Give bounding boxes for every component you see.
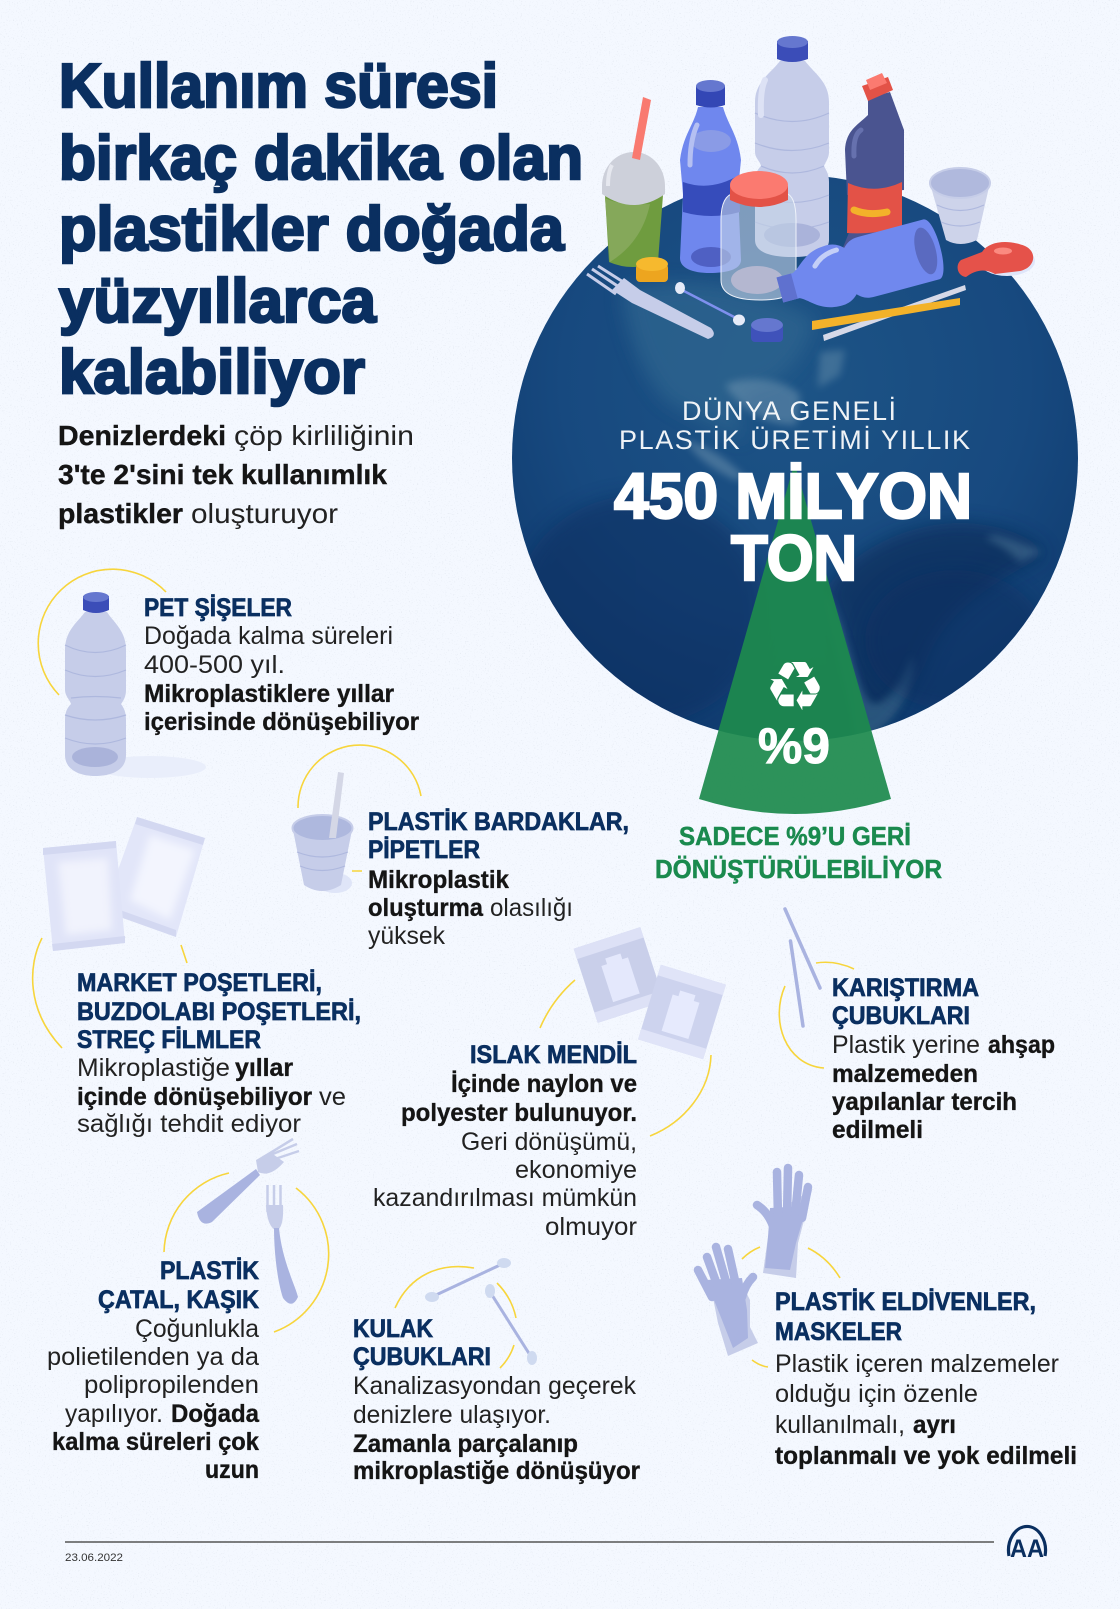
title bbox=[59, 52, 583, 407]
heading bbox=[368, 808, 629, 864]
icon: wipes bbox=[574, 927, 726, 1059]
body text: Çoğunlukla bbox=[135, 1315, 259, 1343]
icon: cup with straw bbox=[292, 772, 352, 893]
heading: PLASTİK bbox=[160, 1257, 259, 1285]
recycling percentage: %9 bbox=[758, 718, 830, 774]
panel: stirring sticks bbox=[779, 909, 1055, 1144]
body text: Geri dönüşümü, bbox=[461, 1128, 637, 1156]
body text: yapılanlar tercih bbox=[832, 1088, 1017, 1116]
heading: ÇUBUKLARI bbox=[832, 1002, 970, 1030]
icon: cotton swabs bbox=[425, 1258, 537, 1365]
body text bbox=[775, 1350, 1077, 1470]
body text: Plastik yerine bbox=[832, 1031, 980, 1059]
heading bbox=[353, 1315, 491, 1371]
title: plastikler doğada bbox=[59, 195, 565, 264]
heading: MASKELER bbox=[775, 1318, 902, 1346]
panel: market bags bbox=[33, 817, 361, 1138]
body text: denizlere ulaşıyor. bbox=[353, 1401, 551, 1429]
big figure: 450 MİLYON bbox=[614, 460, 972, 532]
body text: mikroplastiğe dönüşüyor bbox=[353, 1457, 640, 1485]
body text: ve bbox=[319, 1083, 346, 1111]
body text: içinde dönüşebiliyor bbox=[77, 1083, 312, 1111]
body text: uzun bbox=[205, 1456, 259, 1484]
heading: PET ŞİŞELER bbox=[144, 594, 292, 622]
body text: polipropilenden bbox=[84, 1371, 259, 1399]
body text: Kanalizasyondan geçerek bbox=[353, 1372, 636, 1400]
subtitle: Denizlerdeki bbox=[58, 420, 226, 451]
heading: ÇUBUKLARI bbox=[353, 1343, 491, 1371]
body text: polyester bulunuyor. bbox=[401, 1099, 637, 1127]
icon: large clear bottle bbox=[755, 36, 829, 257]
body text: 400-500 yıl. bbox=[144, 651, 285, 679]
body text: Zamanla parçalanıp bbox=[353, 1430, 578, 1458]
icon: cotton swab on globe bbox=[675, 282, 745, 326]
body text: Mikroplastik bbox=[368, 866, 509, 894]
body text bbox=[77, 1054, 346, 1138]
heading: BUZDOLABI POŞETLERİ, bbox=[77, 998, 361, 1026]
body text: Doğada kalma süreleri bbox=[144, 622, 393, 650]
title: yüzyıllarca bbox=[59, 267, 377, 336]
recycling note: DÖNÜŞTÜRÜLEBİLİYOR bbox=[655, 854, 942, 884]
subtitle: oluşturuyor bbox=[191, 498, 338, 529]
title: kalabiliyor bbox=[59, 338, 365, 407]
big figure bbox=[614, 460, 972, 594]
body text: polietilenden ya da bbox=[47, 1343, 259, 1371]
heading bbox=[832, 974, 979, 1030]
body text: olasılığı bbox=[490, 894, 573, 922]
body text: Doğada bbox=[171, 1400, 260, 1428]
heading: ISLAK MENDİL bbox=[470, 1041, 637, 1069]
recycling note: SADECE %9’U GERİ bbox=[679, 821, 911, 851]
icon: stirring sticks bbox=[785, 909, 820, 1026]
icon: orange cap bbox=[636, 257, 668, 282]
subtitle: çöp kirliliğinin bbox=[234, 420, 414, 451]
panel: gloves and masks bbox=[698, 1168, 1077, 1470]
icon: red spoon bbox=[958, 242, 1035, 277]
body text bbox=[353, 1372, 640, 1485]
icon: plastic bags bbox=[43, 817, 205, 951]
body text: edilmeli bbox=[832, 1116, 923, 1144]
recycling note bbox=[655, 821, 942, 884]
logo: AA: AA bbox=[1010, 1535, 1044, 1563]
body text bbox=[144, 622, 419, 736]
icon: bottom glove bbox=[698, 1247, 758, 1356]
panel: cups and straws bbox=[292, 745, 629, 950]
panel: cotton swabs bbox=[353, 1258, 640, 1485]
panel: wet wipes bbox=[373, 927, 726, 1241]
body text: içerisinde dönüşebiliyor bbox=[144, 708, 419, 736]
icon: bleach bottle bbox=[842, 73, 904, 250]
heading: ÇATAL, KAŞIK bbox=[98, 1286, 259, 1314]
icon: top glove bbox=[757, 1168, 812, 1278]
globe caption: PLASTİK ÜRETİMİ YILLIK bbox=[619, 424, 970, 455]
body text: sağlığı tehdit ediyor bbox=[77, 1110, 301, 1138]
body text: oluşturma bbox=[368, 894, 484, 922]
heading bbox=[77, 969, 361, 1054]
icon: blue cap bbox=[751, 318, 783, 342]
title: birkaç dakika olan bbox=[59, 124, 583, 193]
panel: PET bottles bbox=[38, 569, 419, 778]
recycling wedge bbox=[699, 463, 891, 814]
big figure: TON bbox=[731, 522, 857, 594]
icon: PET bottle bbox=[65, 592, 206, 778]
body text: İçinde naylon ve bbox=[451, 1070, 637, 1098]
body text: malzemeden bbox=[832, 1060, 978, 1088]
globe caption bbox=[619, 395, 970, 455]
icon: drink cup with straw bbox=[602, 97, 665, 267]
icon: glass jar bbox=[721, 171, 796, 300]
body text: Mikroplastiğe bbox=[77, 1054, 230, 1082]
body text: kazandırılması mümkün bbox=[373, 1184, 637, 1212]
icon: plastic cup bbox=[930, 168, 990, 244]
panel: plastic cutlery bbox=[47, 1139, 329, 1484]
heading: MARKET POŞETLERİ, bbox=[77, 969, 322, 997]
body text: yapılıyor. bbox=[65, 1400, 163, 1428]
date: 23.06.2022 bbox=[65, 1552, 123, 1564]
icon: fork on globe bbox=[587, 266, 714, 339]
icon: blue bottle bbox=[680, 80, 741, 273]
heading: KARIŞTIRMA bbox=[832, 974, 979, 1002]
title: Kullanım süresi bbox=[59, 52, 498, 121]
body text: olmuyor bbox=[545, 1213, 637, 1241]
body text bbox=[47, 1315, 260, 1484]
body text bbox=[368, 866, 573, 950]
body text bbox=[373, 1070, 637, 1241]
globe bbox=[512, 175, 1078, 745]
body text: yüksek bbox=[368, 922, 445, 950]
body text: toplanmalı ve yok edilmeli bbox=[775, 1442, 1077, 1470]
heading: PLASTİK BARDAKLAR, bbox=[368, 808, 629, 836]
globe caption: DÜNYA GENELİ bbox=[682, 395, 896, 426]
heading: PLASTİK ELDİVENLER, bbox=[775, 1288, 1036, 1316]
heading: STREÇ FİLMLER bbox=[77, 1026, 261, 1054]
icon: forks bbox=[197, 1139, 299, 1304]
body text: yıllar bbox=[235, 1054, 293, 1082]
icon: lying bottle bbox=[772, 217, 948, 320]
subtitle: plastikler bbox=[58, 498, 183, 529]
body text: olduğu için özenle bbox=[775, 1380, 978, 1408]
icon: straws on globe bbox=[812, 285, 966, 341]
body text: ayrı bbox=[913, 1411, 956, 1439]
heading bbox=[775, 1288, 1036, 1346]
subtitle bbox=[58, 420, 414, 529]
body text bbox=[832, 1031, 1055, 1144]
body text: ekonomiye bbox=[515, 1156, 637, 1184]
body text: kullanılmalı, bbox=[775, 1411, 905, 1439]
heading bbox=[98, 1257, 259, 1314]
icon: recycle: ♻ bbox=[765, 648, 825, 727]
heading: PİPETLER bbox=[368, 836, 480, 864]
body text: kalma süreleri çok bbox=[52, 1428, 259, 1456]
body text: Mikroplastiklere yıllar bbox=[144, 680, 394, 708]
heading: KULAK bbox=[353, 1315, 433, 1343]
subtitle: 3'te 2'sini tek kullanımlık bbox=[58, 459, 387, 490]
body text: Plastik içeren malzemeler bbox=[775, 1350, 1059, 1378]
body text: ahşap bbox=[988, 1031, 1055, 1059]
